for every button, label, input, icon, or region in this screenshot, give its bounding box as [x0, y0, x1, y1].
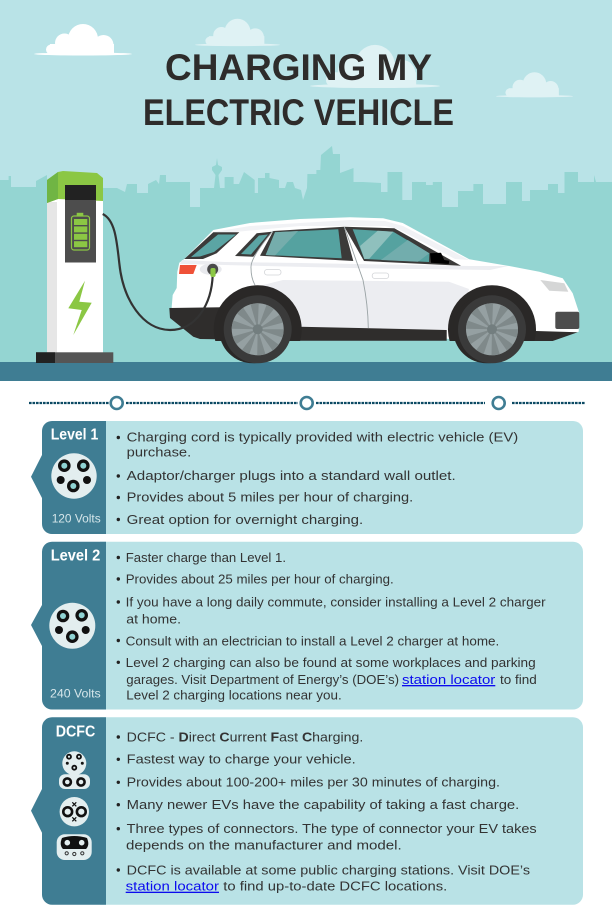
bullet list: If you have a long daily commute, consider installing a Level 2 charger	[126, 595, 546, 610]
icon: battery	[72, 213, 90, 250]
bullet list: DCFC - Direct Current Fast Charging.	[127, 729, 363, 744]
cloud: white left	[34, 24, 132, 56]
icon: CCS connector	[59, 751, 90, 789]
bullet list: Many newer EVs have the capability of taking a fast charge.	[127, 797, 519, 812]
icon: J1772 connector	[49, 603, 95, 649]
panel background	[100, 542, 583, 710]
car body	[172, 217, 579, 340]
station base	[36, 352, 113, 363]
voltage label: 120 Volts	[52, 511, 101, 525]
road	[0, 362, 612, 381]
front grille	[555, 312, 579, 329]
lower door shading	[263, 280, 469, 330]
beltline shading	[180, 260, 508, 270]
bullet list	[117, 550, 546, 703]
bullet list: Three types of connectors. The type of connector your EV takes	[127, 821, 537, 836]
roof shading	[213, 220, 469, 260]
bullet list: Provides about 100-200+ miles per 30 minutes of charging.	[127, 775, 500, 790]
bullet list: purchase.	[127, 445, 191, 460]
panel: DCFC	[31, 717, 583, 905]
front underbody	[530, 331, 578, 341]
title: CHARGING MY	[165, 47, 432, 88]
charge port	[200, 264, 222, 275]
sidebar	[31, 717, 106, 905]
bullet list: Level 2 charging can also be found at some workplaces and parking	[126, 655, 536, 670]
bullet list: Fastest way to charge your vehicle.	[127, 752, 356, 767]
icon: CHAdeMO connector	[60, 797, 89, 826]
bullet list: Charging cord is typically provided with electric vehicle (EV)	[127, 430, 518, 445]
bullet list: Consult with an electrician to install a Level 2 charger at home.	[126, 633, 499, 648]
bullet list: Provides about 25 miles per hour of charging.	[126, 572, 394, 587]
headlight	[540, 280, 568, 292]
rear door window	[260, 227, 353, 261]
hero illustration	[0, 0, 612, 381]
front door window	[344, 227, 461, 266]
icon: lightning bolt	[68, 281, 92, 335]
charging cable	[103, 214, 216, 330]
door handles	[264, 270, 389, 278]
front wheel	[448, 285, 536, 363]
bullet list	[117, 729, 537, 894]
cloud: pale top centre	[195, 19, 280, 46]
timeline divider	[29, 397, 585, 409]
cloud: pale behind title	[310, 45, 440, 88]
title: ELECTRIC VEHICLE	[143, 92, 454, 133]
city skyline	[0, 146, 612, 363]
sky background	[0, 0, 612, 363]
panel background	[100, 717, 583, 905]
title	[143, 47, 454, 133]
icon: Tesla-style connector	[57, 834, 92, 860]
bullet list: Great option for overnight charging.	[127, 512, 363, 527]
car	[169, 217, 579, 363]
rear wheel	[214, 285, 302, 363]
bullet list: to find up-to-date DCFC locations.	[223, 879, 447, 894]
bullet list: garages. Visit Department of Energy’s (DOE’s)	[126, 672, 399, 687]
quarter window	[235, 232, 272, 257]
side mirror	[430, 253, 449, 264]
bullet list: depends on the manufacturer and model.	[126, 838, 402, 853]
panel: Level 2	[31, 542, 583, 710]
bullet list: Level 2 charging locations near you.	[126, 688, 342, 703]
charging station	[36, 171, 113, 363]
bullet list: station locator	[126, 879, 220, 894]
heading: Level 2	[51, 548, 100, 565]
rear underbody	[169, 307, 447, 341]
voltage label: 240 Volts	[50, 687, 101, 701]
bullet list: Provides about 5 miles per hour of charging.	[127, 490, 413, 505]
panel background	[100, 421, 583, 534]
cloud: pale right	[496, 72, 573, 97]
door seams	[251, 227, 368, 328]
bullet list: at home.	[126, 611, 181, 626]
rear hatch window	[184, 232, 239, 259]
bullet list: to find	[500, 672, 537, 687]
bullet list: Adaptor/charger plugs into a standard wall outlet.	[127, 468, 456, 483]
bullet list: DCFC is available at some public charging stations. Visit DOE’s	[127, 862, 530, 877]
bullet list	[117, 430, 518, 527]
sidebar	[31, 542, 106, 710]
icon: J1772 connector	[51, 453, 97, 499]
sidebar	[31, 421, 106, 534]
heading: DCFC	[56, 724, 95, 741]
tail light	[179, 265, 197, 274]
heading: Level 1	[51, 426, 99, 443]
bullet list: Faster charge than Level 1.	[126, 550, 286, 565]
panel: Level 1	[31, 421, 583, 534]
bullet list: station locator	[402, 672, 496, 687]
